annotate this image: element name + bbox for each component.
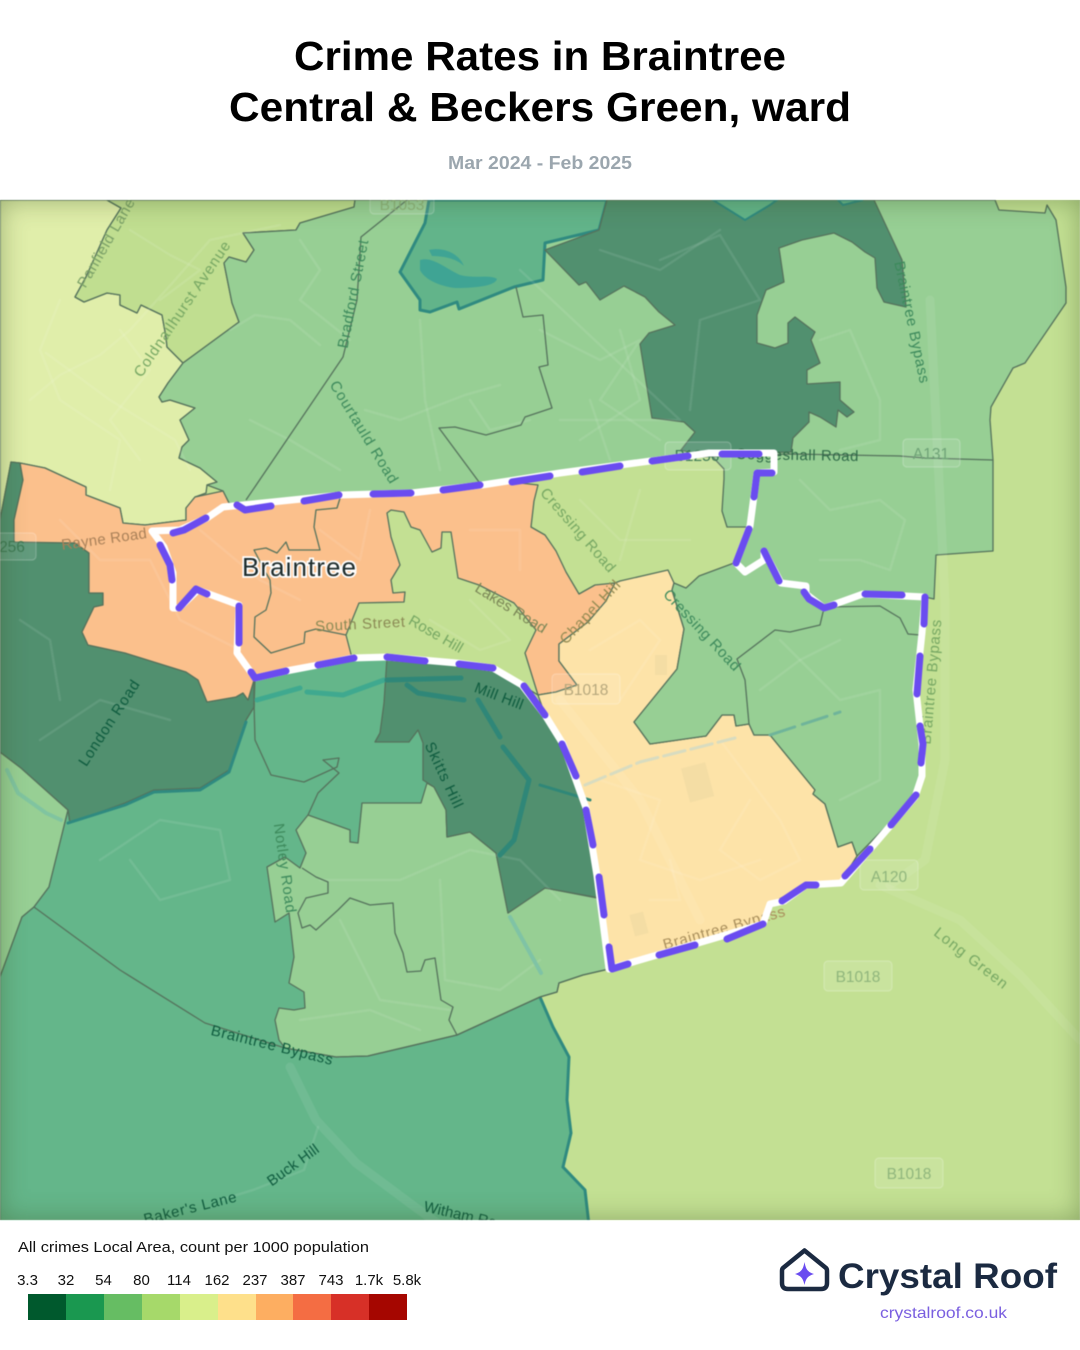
legend tick labels: 237 <box>242 1272 268 1289</box>
legend tick labels: 3.3 <box>17 1272 38 1289</box>
legend tick labels: 162 <box>204 1272 230 1289</box>
ward boundary: white outline with purple dashes <box>152 453 925 969</box>
label: Rayne Road: Rayne Road <box>60 525 148 554</box>
region: Skitts Hill dark green <box>375 657 600 913</box>
label: Long Green: Long Green <box>930 924 1011 992</box>
title <box>229 33 851 130</box>
label: Braintree Bypass south: Braintree Bypass <box>661 903 787 954</box>
legend colour scale <box>28 1294 407 1320</box>
choropleth map <box>0 199 1080 1221</box>
label: Cressing Road south: Cressing Road <box>660 586 744 675</box>
region: south mid-green <box>267 783 609 1057</box>
icon: house with star <box>782 1250 827 1289</box>
region: north dark green <box>545 200 906 455</box>
label: Coggeshall Road: Coggeshall Road <box>735 446 859 465</box>
label: Braintree Bypass east: Braintree Bypass <box>918 619 945 745</box>
badge: B1018 east: B1018 <box>836 969 880 986</box>
label: Buck Hill: Buck Hill <box>264 1141 323 1190</box>
legend tick labels: 387 <box>280 1272 306 1289</box>
region: south-east pale orange <box>538 570 857 969</box>
label: London Road: London Road <box>75 677 144 769</box>
road number badges <box>0 190 960 1188</box>
label: Braintree town name: Braintree <box>242 552 356 582</box>
title: Central & Beckers Green, ward <box>229 84 851 130</box>
badge: B1018 south-east: B1018 <box>887 1166 931 1183</box>
road network <box>20 225 1080 1225</box>
badge: A120: A120 <box>871 869 907 886</box>
label: Lakes Road: Lakes Road <box>472 580 550 637</box>
legend tick labels: 743 <box>318 1272 344 1289</box>
badge: A131: A131 <box>913 446 949 463</box>
logo: Crystal Roof <box>782 1250 1057 1322</box>
region: west strip mid-green <box>0 752 68 977</box>
legend tick labels: 32 <box>58 1272 74 1289</box>
region: south-west large green <box>0 657 600 1225</box>
label: Cressing Road north: Cressing Road <box>536 485 619 576</box>
region: river edge east of green area <box>540 997 589 1225</box>
purple dashes <box>160 454 925 969</box>
badge: B1256 <box>665 442 731 470</box>
region: lake area green <box>400 200 607 312</box>
badge: 256 <box>0 533 36 560</box>
footer: legend and logo <box>17 1239 1058 1322</box>
label: Mill Hill: Mill Hill <box>472 679 526 714</box>
badge: B1018 east <box>824 961 892 991</box>
label: Courtauld Road: Courtauld Road <box>326 378 401 487</box>
label: South Street: South Street <box>315 614 406 635</box>
region: pale north-west <box>0 200 217 525</box>
label: Braintree Bypass north: Braintree Bypass <box>890 260 933 385</box>
streams <box>7 678 840 973</box>
badge: B1018 centre <box>552 674 620 704</box>
legend tick labels: 114 <box>167 1272 191 1289</box>
region: small green nubs at top edge <box>713 200 863 220</box>
website url: crystalroof.co.uk <box>880 1305 1008 1322</box>
badge: B1256: B1256 <box>675 448 719 465</box>
title: Crime Rates in Braintree <box>294 33 786 79</box>
label: Chapel Hill: Chapel Hill <box>557 577 624 648</box>
badge: A131 <box>903 439 960 467</box>
label: Bradford Street: Bradford Street <box>335 238 372 350</box>
badge: B1018 centre: B1018 <box>564 682 608 699</box>
legend tick labels: 80 <box>133 1272 150 1289</box>
label: Notley Road: Notley Road <box>270 822 299 914</box>
region: east mid-green inside ward <box>634 551 925 856</box>
legend tick labels: 54 <box>95 1272 112 1289</box>
region: west dark green <box>0 462 254 823</box>
label: Rose Hill: Rose Hill <box>406 612 466 657</box>
region: high-rate orange <box>14 463 615 702</box>
road labels <box>60 196 1011 1235</box>
region: Coldnailhurst area <box>75 200 355 363</box>
lighter buildings block in pale area <box>629 655 714 936</box>
interior boundary lines <box>34 200 993 1057</box>
badge: B1018 south-east <box>875 1158 943 1188</box>
legend tick labels: 5.8k <box>393 1272 422 1289</box>
badge: A120 <box>860 860 918 890</box>
label: Coldnailhurst Avenue: Coldnailhurst Avenue <box>131 238 234 380</box>
label: Braintree Bypass south-west: Braintree Bypass <box>209 1022 335 1069</box>
header: title and date range <box>229 33 851 173</box>
base area: low-rate rural east <box>0 200 1080 1220</box>
badge: B1053 <box>370 190 434 214</box>
region: lime enclave in centre <box>346 510 538 695</box>
logo wordmark: Crystal Roof <box>838 1257 1057 1296</box>
legend heading: All crimes Local Area, count per 1000 population <box>18 1239 369 1256</box>
legend tick labels: 1.7k <box>355 1272 384 1289</box>
legend tick labels <box>17 1272 422 1289</box>
label: Skitts Hill: Skitts Hill <box>421 739 466 811</box>
date range subtitle: Mar 2024 - Feb 2025 <box>448 153 632 173</box>
region: north and east mid-green <box>159 200 1066 608</box>
icon: lake <box>420 249 497 288</box>
